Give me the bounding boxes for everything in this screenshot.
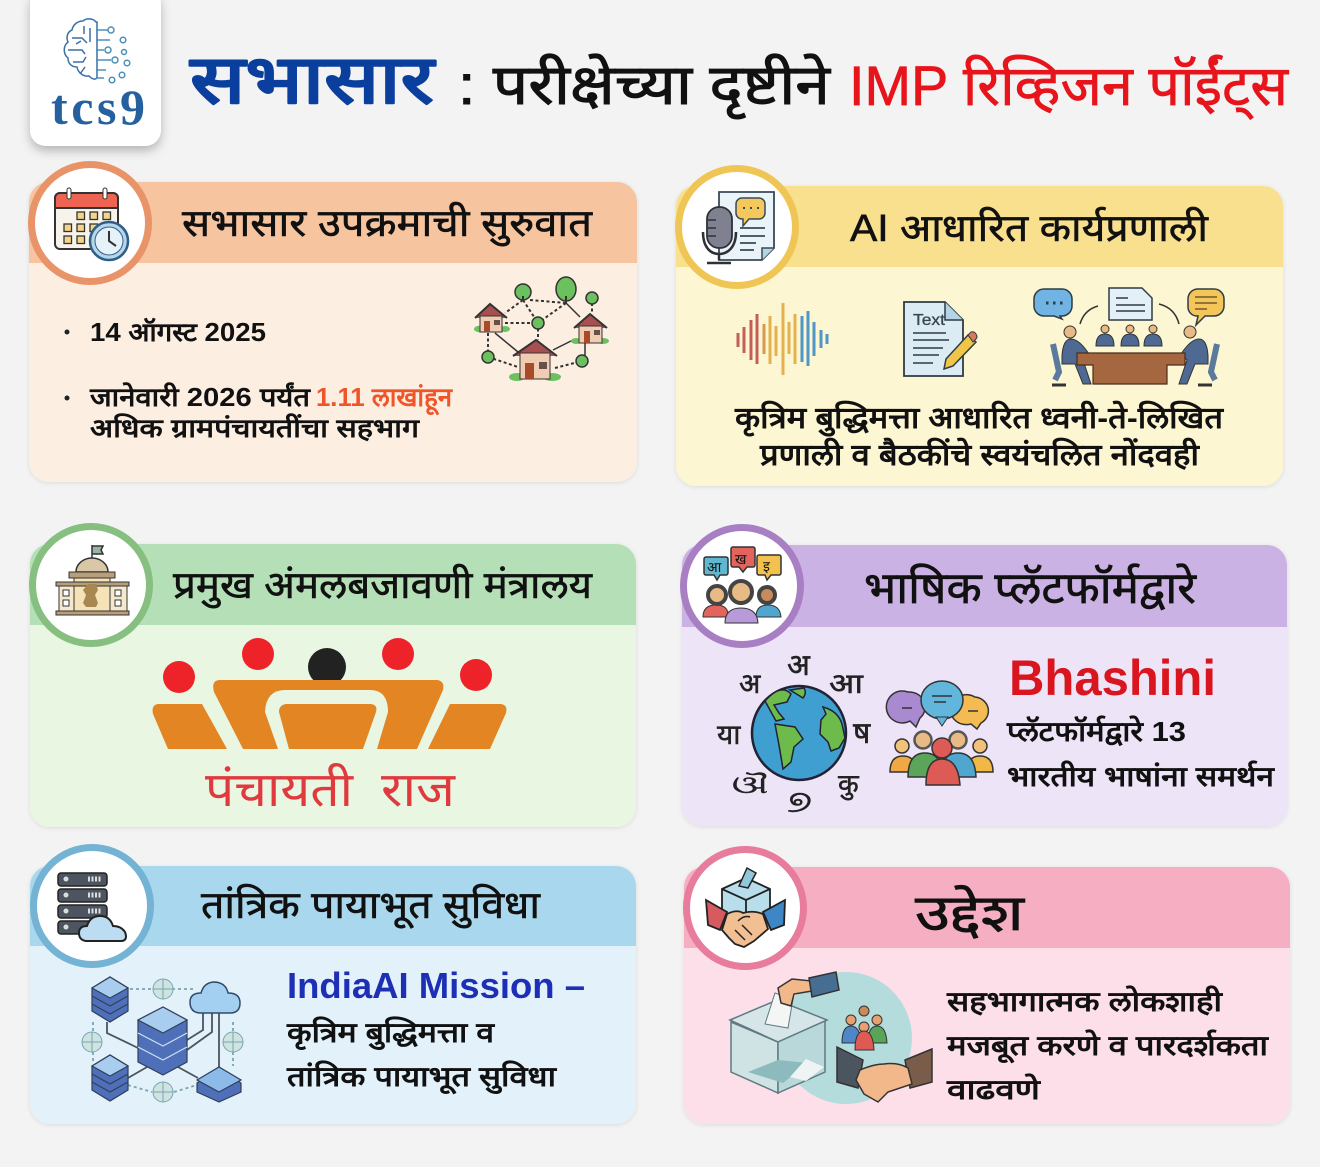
objective text: मजबूत करणे व पारदर्शकता: [946, 1029, 1270, 1064]
icon: village network: [474, 277, 609, 381]
illustration: ballot box, people, handshake: [730, 972, 932, 1104]
icon: sound waveform: [738, 303, 827, 375]
icon: multilingual people: आ: [707, 559, 722, 575]
IndiaAI Mission text: [286, 965, 585, 1095]
heading: AI आधारित कार्यप्रणाली: [850, 206, 1209, 250]
logo text: पंचायती: [205, 762, 355, 817]
IndiaAI Mission text: IndiaAI Mission –: [287, 965, 585, 1006]
icon: ballot box and handshake: [686, 850, 804, 966]
Bhashini text: भारतीय भाषांना समर्थन: [1007, 760, 1276, 792]
icon: calendar and clock: [32, 164, 148, 282]
icon: meeting around table: [1034, 288, 1224, 385]
header band: [684, 867, 1290, 948]
icon: multilingual people: [684, 528, 800, 644]
bullet: gram panchayat participation: जानेवारी 2026 पर्यंत: [89, 382, 311, 412]
logo text: राज: [381, 764, 457, 817]
icon: government building: [32, 526, 150, 644]
icon: circuit brain: [64, 19, 130, 83]
icon: text document with pencil: [904, 302, 977, 376]
icon: text document with pencil: Text: [913, 312, 946, 329]
icon: microphone and document: [678, 168, 796, 286]
Bhashini text: [1006, 650, 1276, 792]
icon: globe with scripts: ୭: [787, 786, 812, 819]
title: [190, 42, 1289, 121]
header band: [676, 186, 1283, 267]
header band: [30, 544, 636, 625]
Bhashini text: प्लॅटफॉर्मद्वारे 13: [1006, 715, 1186, 747]
title phrase: IMP revision points: IMP रिव्हिजन पॉईंट्स: [849, 54, 1289, 121]
title phrase: exam perspective: : परीक्षेच्या दृष्टीने: [458, 53, 831, 120]
bullet: launch date: 14 ऑगस्ट 2025: [90, 317, 266, 347]
IndiaAI Mission text: कृत्रिम बुद्धिमत्ता व: [286, 1016, 496, 1050]
Bhashini text: Bhashini: [1009, 650, 1216, 706]
IndiaAI Mission text: तांत्रिक पायाभूत सुविधा: [286, 1060, 558, 1095]
caption: कृत्रिम बुद्धिमत्ता आधारित ध्वनी-ते-लिखित: [734, 400, 1225, 437]
caption: प्रणाली व बैठकींचे स्वयंचलित नोंदवही: [759, 437, 1200, 472]
panel: AI based workflow: [676, 168, 1283, 486]
objective text: सहभागात्मक लोकशाही: [946, 985, 1224, 1017]
panel: objective: [684, 850, 1290, 1124]
icon: globe with scripts: या: [717, 719, 741, 750]
heading: उद्देश: [915, 885, 1026, 941]
header band: [29, 182, 637, 263]
logo wordmark: tcs9: [51, 79, 145, 135]
bullet: gram panchayat participation: [64, 382, 454, 443]
caption: [734, 400, 1225, 472]
panchayati raj logo: [153, 638, 506, 817]
objective text: वाढवणे: [946, 1073, 1042, 1105]
panel: language platform: [682, 528, 1287, 826]
panel: implementing ministry: [30, 526, 636, 827]
icon: multilingual people: इ: [763, 558, 771, 574]
title word: sabhasaar: सभासार: [190, 42, 435, 118]
icon: globe with scripts: आ: [829, 668, 865, 699]
panel: launch of Sabhasaar: [29, 164, 637, 482]
bullet: gram panchayat participation: अधिक ग्रामपंचायतींचा सहभाग: [90, 413, 421, 443]
icon: globe with scripts: ष: [853, 717, 871, 750]
panel: technical infrastructure: [30, 848, 636, 1124]
icon: server cloud network: [82, 977, 243, 1102]
bullet: gram panchayat participation: 1.11 लाखांहून: [316, 382, 454, 416]
icon: multilingual people: ख: [735, 551, 747, 567]
icon: globe with scripts: अ: [739, 668, 761, 699]
logo card: [30, 0, 161, 146]
icon: globe with scripts: कु: [838, 769, 860, 801]
logo text: [205, 762, 457, 817]
heading: प्रमुख अंमलबजावणी मंत्रालय: [173, 563, 593, 609]
header band: [682, 545, 1287, 627]
heading: भाषिक प्लॅटफॉर्मद्वारे: [864, 563, 1197, 613]
icon: globe with scripts: [717, 649, 871, 819]
icon: globe with scripts: अ: [787, 649, 811, 682]
icon: globe with scripts: ଔ: [732, 772, 768, 799]
header band: [30, 866, 636, 946]
icon: speech bubbles and crowd: [886, 681, 993, 785]
icon: servers and cloud: [34, 848, 150, 964]
heading: तांत्रिक पायाभूत सुविधा: [201, 883, 541, 929]
objective text: [946, 985, 1270, 1105]
heading: सभासार उपक्रमाची सुरुवात: [182, 201, 593, 247]
